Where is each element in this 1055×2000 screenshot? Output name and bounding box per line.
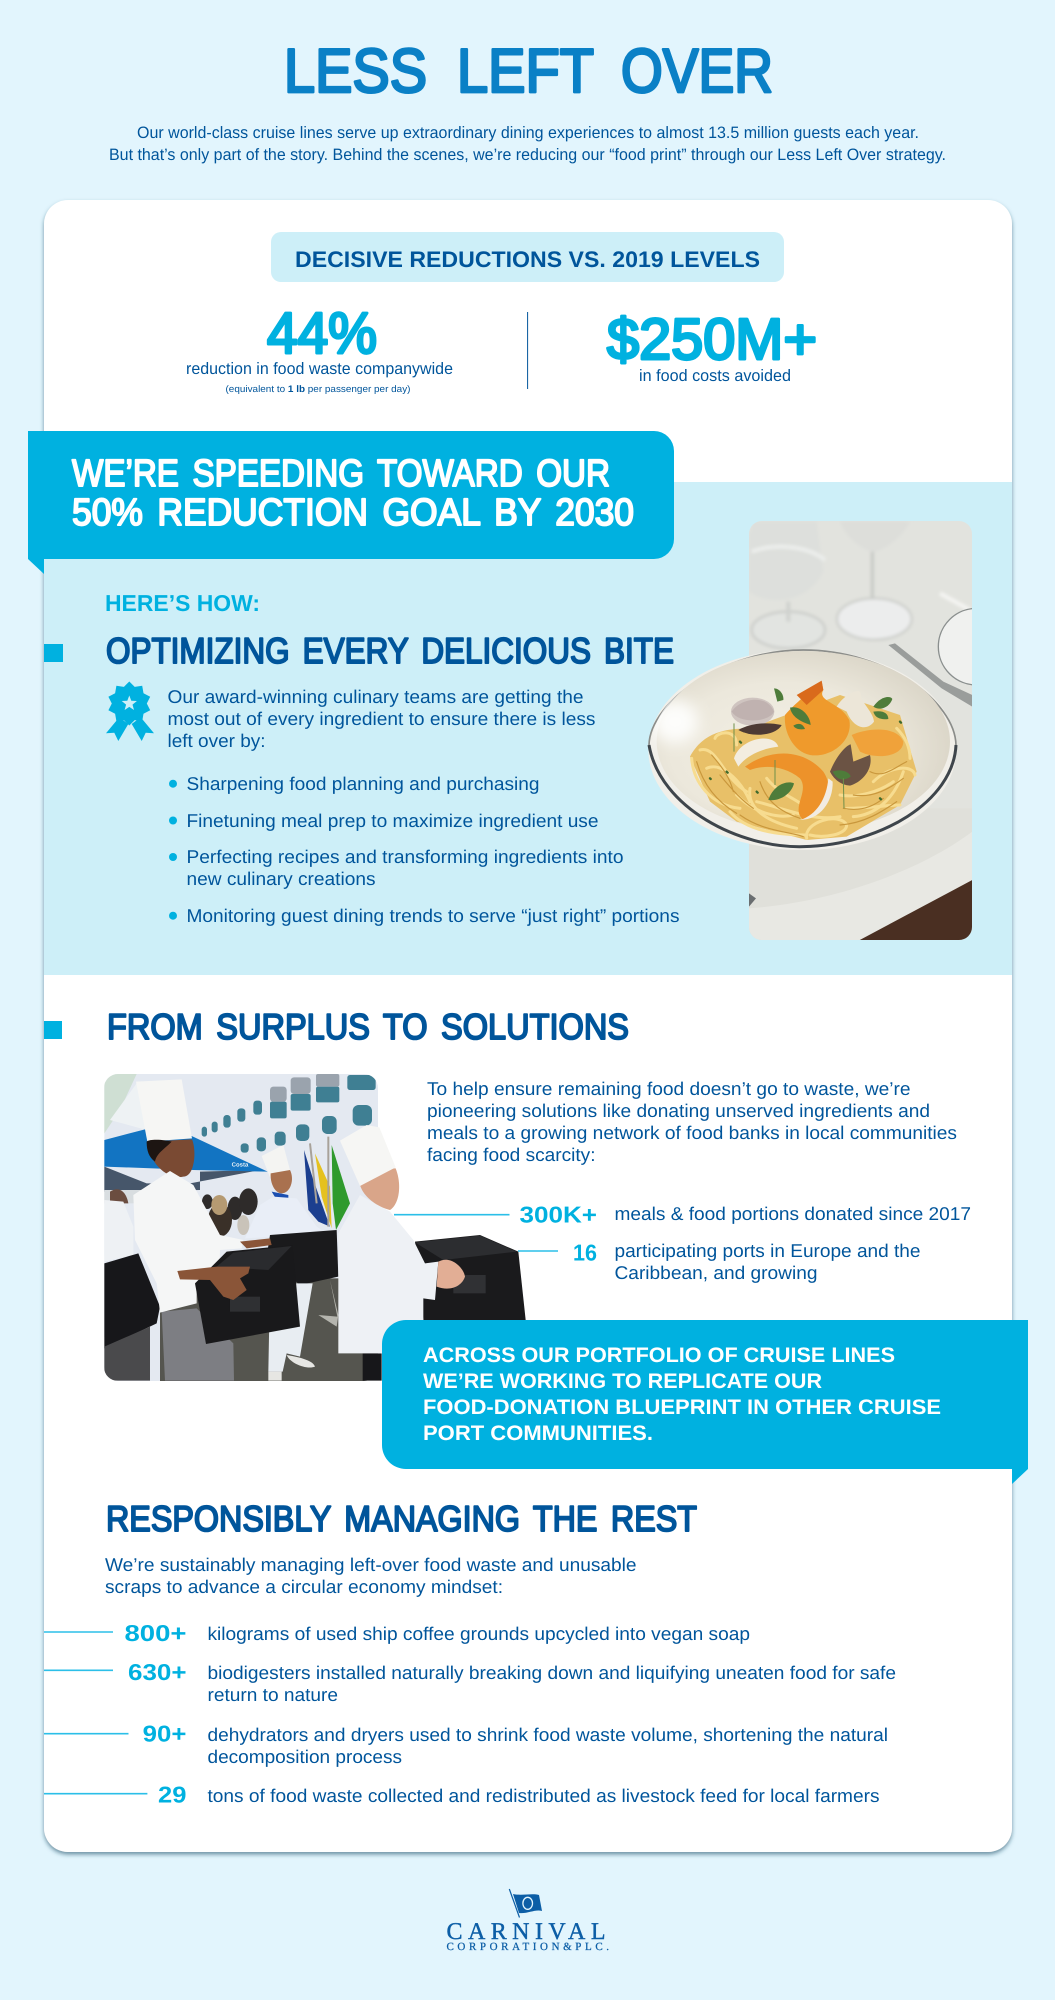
stat: 800+ coffee grounds: kilograms of used ship coffee grounds upcycled into vegan soap	[208, 1623, 750, 1644]
chef 1 box	[195, 1245, 300, 1344]
title: LEFT	[457, 37, 594, 106]
stat: 16 ports: 16	[573, 1240, 597, 1266]
stat: 630+ biodigesters: return to nature	[208, 1684, 338, 1705]
stat: 90+ dehydrators: decomposition process	[208, 1746, 402, 1767]
title: LESS	[284, 37, 427, 106]
text: circular economy: scraps to advance a circular economy mindset:	[105, 1576, 503, 1597]
chef 1 hand	[177, 1267, 250, 1300]
bullet list	[169, 773, 680, 926]
heading: from surplus to solutions: FROM SURPLUS TO SOLUTIONS	[107, 1006, 629, 1047]
heading: optimizing: OPTIMIZING EVERY DELICIOUS BITE	[106, 630, 674, 671]
marker	[44, 1021, 62, 1039]
icon: flag	[509, 1889, 542, 1918]
stat: 630+ biodigesters: biodigesters installed naturally breaking down and liquifying uneaten food for safe	[208, 1662, 896, 1683]
chef 1 pants	[162, 1308, 234, 1381]
text: food donation	[427, 1078, 957, 1165]
stat: 44%: (equivalent to 1 lb per passenger per day)	[226, 384, 410, 395]
banner: speeding toward goal: WE’RE SPEEDING TOWARD OUR	[72, 453, 610, 495]
stat: 29 tons: 29	[158, 1782, 186, 1808]
stat: 29 tons	[44, 1782, 880, 1808]
stat: 300K+ meals: 300K+	[520, 1202, 597, 1228]
text: food donation: To help ensure remaining food doesn’t go to waste, we’re	[427, 1078, 910, 1099]
photo: chefs carrying food containers	[104, 1074, 526, 1382]
stat: 90+ dehydrators: dehydrators and dryers used to shrink food waste volume, shortening the natural	[208, 1724, 888, 1745]
bullet list: new culinary creations	[186, 868, 376, 889]
stat: 29 tons: tons of food waste collected and redistributed as livestock feed for local farmers	[208, 1785, 880, 1806]
text: culinary teams: most out of every ingredient to ensure there is less	[168, 708, 596, 729]
stat: $250M+: $250M+	[607, 307, 817, 372]
stat: 16 ports	[518, 1240, 920, 1283]
text: culinary teams: left over by:	[168, 730, 266, 751]
icon: award ribbon	[106, 682, 154, 741]
chef 1 coat	[133, 1171, 243, 1313]
stat: 630+ biodigesters	[44, 1659, 896, 1705]
marker	[44, 644, 63, 662]
stat: 800+ coffee grounds: 800+	[124, 1620, 186, 1646]
heading pill	[271, 232, 784, 282]
bullet list: Sharpening food planning and purchasing	[186, 773, 540, 794]
stat: 44%	[186, 301, 453, 395]
stat: 16 ports: participating ports in Europe and the	[614, 1240, 920, 1261]
chef 1 hat and face	[136, 1079, 192, 1142]
bullet list: Perfecting recipes and transforming ingredients into	[186, 846, 624, 867]
stat: 44%: reduction in food waste companywide	[186, 360, 453, 378]
left person	[104, 1200, 133, 1262]
intro text: But that’s only part of the story. Behind the scenes, we’re reducing our “food print” through our Less Left Over strategy.	[109, 146, 946, 164]
title: OVER	[621, 37, 773, 106]
photo: chefs carrying food containers: Costa	[232, 1161, 249, 1168]
callout: portfolio blueprint: WE’RE WORKING TO REPLICATE OUR	[423, 1370, 822, 1393]
stat: 44%: 44%	[267, 301, 377, 366]
heading: responsibly managing the rest: RESPONSIBLY MANAGING THE REST	[106, 1498, 697, 1539]
stat: 90+ dehydrators: 90+	[143, 1721, 186, 1747]
logo: Carnival Corporation	[446, 1889, 609, 1953]
banner: speeding toward goal: 50% REDUCTION GOAL BY 2030	[72, 492, 634, 534]
panel: decisive reductions	[186, 232, 817, 395]
center chef	[262, 1145, 290, 1177]
text: culinary teams: Our award-winning culinary teams are getting the	[168, 686, 584, 707]
text: food donation: pioneering solutions like donating unserved ingredients and	[427, 1100, 930, 1121]
bullet list: Monitoring guest dining trends to serve “just right” portions	[186, 905, 680, 926]
right chef cutout	[363, 1353, 382, 1381]
text: here's how: HERE’S HOW:	[105, 590, 260, 616]
stat: $250M+: in food costs avoided	[639, 367, 791, 385]
text: food donation: meals to a growing network of food banks in local communities	[427, 1122, 957, 1143]
stat: 300K+ meals: meals & food portions donated since 2017	[614, 1203, 971, 1224]
text: circular economy	[105, 1554, 636, 1597]
text: culinary teams	[168, 686, 596, 751]
callout: portfolio blueprint	[382, 1320, 1028, 1484]
callout: portfolio blueprint: FOOD-DONATION BLUEPRINT IN OTHER CRUISE	[423, 1396, 941, 1419]
stat: 800+ coffee grounds	[44, 1620, 750, 1646]
photo: pasta dish on table	[648, 521, 972, 940]
intro text: Our world-class cruise lines serve up extraordinary dining experiences to almost 13.5 million guests each year.	[137, 124, 919, 142]
heading pill: DECISIVE REDUCTIONS VS. 2019 LEVELS	[295, 247, 760, 272]
white card	[44, 200, 1012, 1852]
bullet list: Finetuning meal prep to maximize ingredient use	[186, 810, 598, 831]
title	[284, 37, 773, 106]
stat: 16 ports: Caribbean, and growing	[614, 1262, 818, 1283]
stat: 300K+ meals	[394, 1202, 971, 1228]
banner: speeding toward goal	[28, 431, 674, 574]
text: food donation: facing food scarcity:	[427, 1144, 596, 1165]
header	[109, 37, 946, 164]
callout: portfolio blueprint: PORT COMMUNITIES.	[423, 1422, 653, 1445]
stat: 90+ dehydrators	[44, 1721, 888, 1767]
stat: 630+ biodigesters: 630+	[128, 1659, 186, 1685]
logo: Carnival Corporation: CORPORATION&PLC.	[446, 1941, 609, 1953]
logo: Carnival Corporation: CARNIVAL	[446, 1919, 606, 1945]
callout: portfolio blueprint: ACROSS OUR PORTFOLIO OF CRUISE LINES	[423, 1344, 895, 1367]
panel: optimizing background	[44, 482, 1012, 975]
intro text	[109, 124, 946, 164]
text: circular economy: We’re sustainably managing left-over food waste and unusable	[105, 1554, 636, 1575]
